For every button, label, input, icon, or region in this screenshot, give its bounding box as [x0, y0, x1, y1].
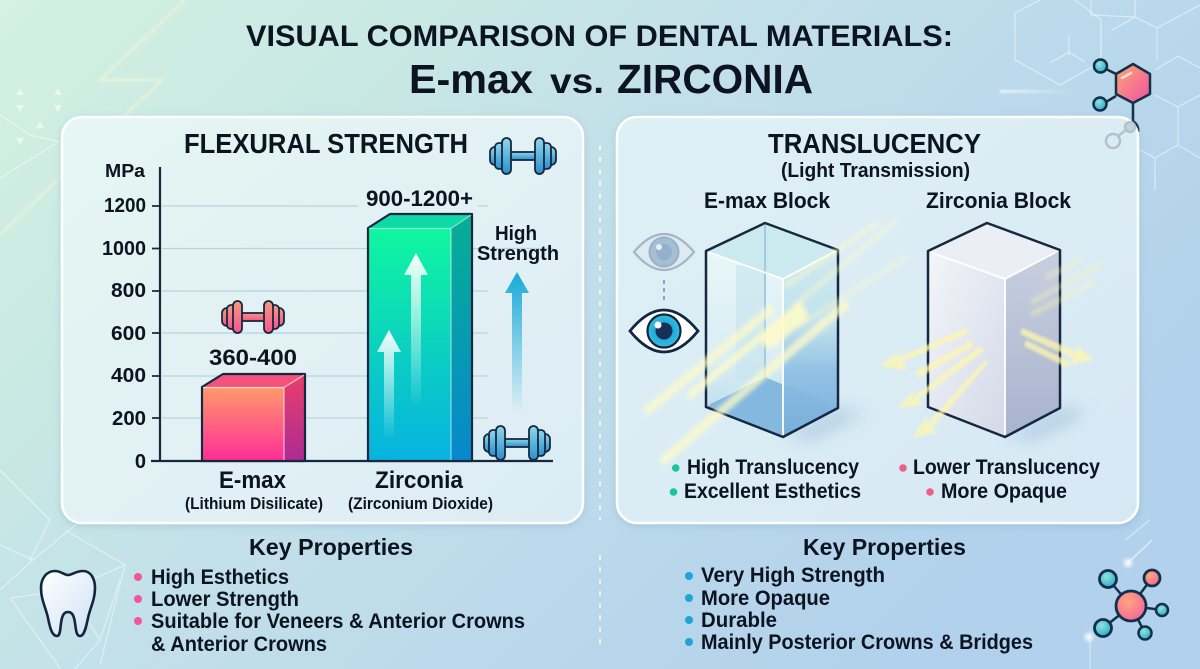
reflected light arrows: Zirconia [880, 328, 1094, 438]
category label: E-max: (Lithium Disilicate) [185, 495, 323, 513]
list: E-max translucency [670, 456, 861, 503]
E-max glass block [706, 223, 838, 437]
list [685, 564, 1033, 654]
list: Zirconia translucency: More Opaque [941, 480, 1067, 503]
panel: translucency [617, 117, 1138, 523]
list: E-max translucency: Excellent Esthetics [684, 480, 861, 503]
title line 2: ZIRCONIA [617, 56, 813, 102]
icon: faded eye [634, 234, 694, 270]
y axis labels: 0 [135, 451, 146, 473]
Zirconia opaque block [928, 223, 1060, 437]
y axis labels: 800 [111, 280, 146, 302]
light rays through E-max block [648, 222, 905, 460]
ghost molecule icon [1106, 122, 1135, 148]
connector: eye dashes [663, 280, 665, 304]
icon: blue eye [630, 310, 698, 352]
list: Zirconia translucency [899, 456, 1100, 503]
heading: translucency: TRANSLUCENCY [768, 128, 981, 159]
list: E-max translucency: High Translucency [687, 456, 859, 479]
category label: E-max [185, 467, 323, 513]
key properties: Zirconia [685, 534, 1033, 654]
panel: flexural strength [62, 117, 583, 523]
callout: high strength [477, 223, 559, 265]
y axis labels: 600 [111, 323, 146, 345]
category label: E-max: E-max [219, 467, 287, 494]
list: Mainly Posterior Crowns & Bridges [701, 631, 1033, 654]
list: & Anterior Crowns [151, 633, 327, 656]
category label: Zirconia: Zirconia [375, 467, 464, 494]
title [246, 20, 953, 102]
bar: Zirconia [368, 214, 472, 461]
icon: pink dumbbell [222, 301, 284, 333]
title line 2: E-max [409, 56, 533, 102]
heading: Key Properties [249, 534, 413, 560]
list [134, 566, 525, 656]
bar: E-max [202, 374, 305, 461]
arrow: tall white up arrow [404, 253, 428, 408]
arrow: high strength [505, 272, 529, 412]
callout: high strength: Strength [477, 243, 559, 265]
list: More Opaque [701, 587, 830, 610]
molecule icon: top right [1094, 60, 1150, 132]
y axis labels [102, 195, 146, 473]
y axis labels: 1200 [104, 195, 146, 217]
title line 2 [409, 56, 813, 102]
list: Durable [701, 609, 777, 632]
list: Zirconia translucency: Lower Translucency [913, 456, 1100, 479]
icon: blue dumbbell bottom [484, 426, 550, 460]
heading: Key Properties [803, 534, 966, 560]
key properties: E-max [134, 534, 525, 656]
y axis labels: 400 [111, 365, 146, 387]
category label: Zirconia [348, 467, 493, 513]
list: Suitable for Veneers & Anterior Crowns [151, 610, 525, 633]
title line 1: VISUAL COMPARISON OF DENTAL MATERIALS: [246, 20, 953, 53]
value label: Zirconia: 900-1200+ [366, 186, 473, 211]
arrow: small white up arrow [377, 330, 401, 440]
list: Lower Strength [151, 588, 299, 611]
list: High Esthetics [151, 566, 289, 589]
heading: flexural strength: FLEXURAL STRENGTH [184, 128, 468, 159]
y axis labels: 200 [112, 408, 146, 430]
callout: high strength: High [495, 223, 537, 245]
list: Very High Strength [701, 564, 885, 587]
category label: Zirconia: (Zirconium Dioxide) [348, 495, 493, 513]
molecule icon: bottom right [1094, 570, 1168, 640]
y axis unit: MPa [105, 161, 146, 181]
icon: tooth [41, 571, 95, 636]
subheading: light transmission: (Light Transmission) [781, 159, 970, 182]
label: E-max block: E-max Block [704, 188, 830, 213]
title line 2: vs. [550, 62, 604, 101]
icon: blue dumbbell top [490, 138, 556, 174]
shadow: blocks [783, 408, 1090, 440]
value label: E-max: 360-400 [209, 345, 297, 370]
y axis labels: 1000 [102, 238, 146, 260]
label: Zirconia block: Zirconia Block [926, 188, 1071, 213]
bar chart [102, 161, 559, 513]
